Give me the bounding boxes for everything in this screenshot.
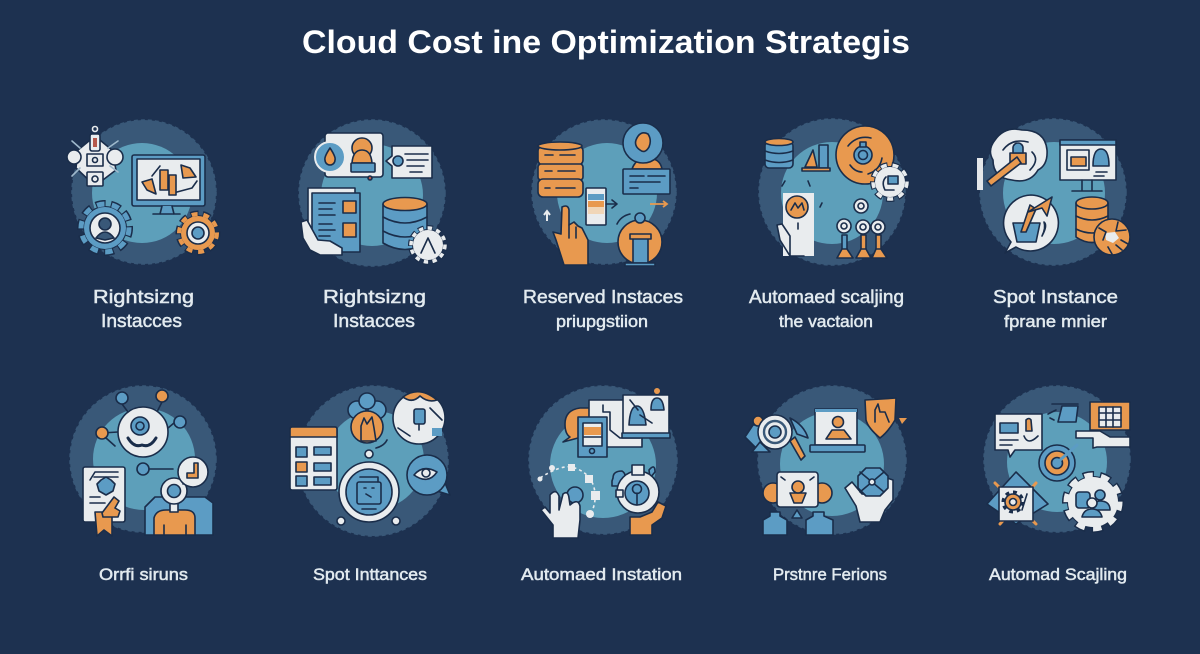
backdrop circles [529, 386, 677, 534]
label: Spot Instance [993, 286, 1118, 307]
icon: speech bubble with eye [407, 455, 450, 495]
icon: info card [386, 146, 432, 178]
icon: robot node cluster [67, 126, 123, 186]
panel: automated instation [521, 386, 682, 584]
icon: network with anchor node [96, 390, 186, 475]
icon: monitor with map [132, 155, 205, 214]
icon: certificate with ribbon [83, 467, 125, 536]
icon: ring with robot [339, 462, 399, 522]
icon: chat card with person [315, 133, 383, 180]
label [323, 286, 426, 331]
label [749, 286, 904, 331]
icon: cream gear with persons [612, 465, 659, 513]
panel: prstnre ferions [745, 386, 907, 584]
label: Automad Scajling [989, 565, 1127, 584]
icon: orange shield with hand [865, 398, 907, 438]
icon: card with orange ears [763, 472, 832, 507]
backdrop circles [759, 119, 905, 265]
label [523, 286, 683, 331]
icon: database [383, 198, 427, 250]
icon: dotted curve with nodes [538, 464, 600, 518]
icon: blue database [765, 138, 793, 168]
icon: orange database [538, 142, 583, 197]
icon: cream hand with gem [845, 468, 893, 522]
label [993, 286, 1118, 331]
icon: folder [1048, 404, 1078, 422]
backdrop circles [298, 386, 448, 536]
backdrop circles [72, 120, 216, 264]
icon: bar chart [802, 145, 830, 171]
icon: card with bell [622, 388, 670, 438]
backdrop circles [984, 386, 1130, 532]
label [93, 286, 194, 331]
label: Rightsizng [93, 286, 194, 307]
label: Automaed Instation [521, 565, 682, 584]
icon: speech bubble with tool [178, 457, 208, 487]
label: Prstnre Ferions [773, 565, 887, 584]
icon: cream gear with team [1066, 475, 1120, 529]
icon: orange gear [179, 214, 217, 252]
icon: cloud cluster with hand [348, 393, 387, 448]
icon: blue gear with person [81, 204, 129, 252]
icon: cream gear [873, 165, 907, 199]
panel: spot instance [977, 119, 1130, 331]
icon: target sliders [837, 199, 887, 258]
label: fprane mnier [1004, 312, 1107, 331]
icon: speech card with figure [995, 414, 1042, 457]
icon: orange database [1076, 197, 1108, 242]
label: Instacces [101, 310, 182, 331]
icon: hand holding [301, 220, 342, 255]
icon: orange hand [630, 502, 666, 535]
panel: automated scaling [749, 119, 907, 331]
icon: orange monitor with building [1076, 402, 1130, 448]
label: Reserved Instaces [523, 286, 683, 307]
icon: globe [1094, 219, 1130, 255]
icon: diamond with gear and pencils [987, 472, 1048, 524]
panel: reserved instances [523, 120, 683, 331]
icon: map globe [393, 392, 445, 444]
label: priupgstiion [556, 312, 648, 331]
backdrop circles [758, 386, 906, 534]
backdrop circles [532, 120, 676, 264]
backdrop circles [70, 386, 216, 532]
backdrop circles [980, 119, 1126, 265]
icon: tablet [578, 417, 607, 457]
label: Instacces [333, 310, 415, 331]
icon: hand with card [777, 181, 822, 256]
icon: orange bubble [563, 408, 593, 442]
icon: cream gear [411, 228, 445, 262]
icon: person with ring head [145, 478, 213, 535]
panel: rightsizing instances 1 [67, 120, 217, 331]
icon: cream hand with blob [541, 487, 583, 538]
icon: blue card [623, 169, 670, 194]
arrow: up small [544, 211, 550, 221]
panel: orrfi siruns [70, 386, 216, 584]
label: Automaed scaljing [749, 286, 904, 307]
icon: orange figure in circle [617, 213, 662, 266]
label: Spot Inttances [313, 565, 427, 584]
backdrop circles [299, 120, 445, 266]
icon: app window [290, 427, 337, 490]
icon: checklist [308, 188, 360, 252]
icon: orange pointing hand [553, 206, 588, 265]
icon: monitor [1060, 140, 1116, 191]
panel: spot instances [290, 386, 450, 584]
icon: document with flow [589, 400, 642, 447]
icon: people and magnifier [745, 415, 808, 460]
panel: automad scajling [984, 386, 1130, 584]
arrow: right [650, 201, 667, 207]
label: Orrfi siruns [99, 565, 188, 584]
icon: speech bubble with arrow [1004, 195, 1058, 253]
icon: target with needle [1039, 445, 1077, 481]
icon: phone [586, 188, 617, 225]
icon: cloud with lock and arm [977, 129, 1047, 190]
title: Cloud Cost ine Optimization Strategis [302, 24, 910, 60]
icon: laptop with user [810, 409, 865, 452]
decorative nodes [337, 450, 400, 525]
label: the vactaion [779, 312, 873, 331]
icon: blue people [763, 510, 833, 535]
label: Rightsizng [323, 286, 426, 307]
icon: top badge with dome [623, 123, 663, 169]
icon: orange dial [836, 126, 894, 184]
panel: rightsizing instances 2 [299, 120, 445, 331]
